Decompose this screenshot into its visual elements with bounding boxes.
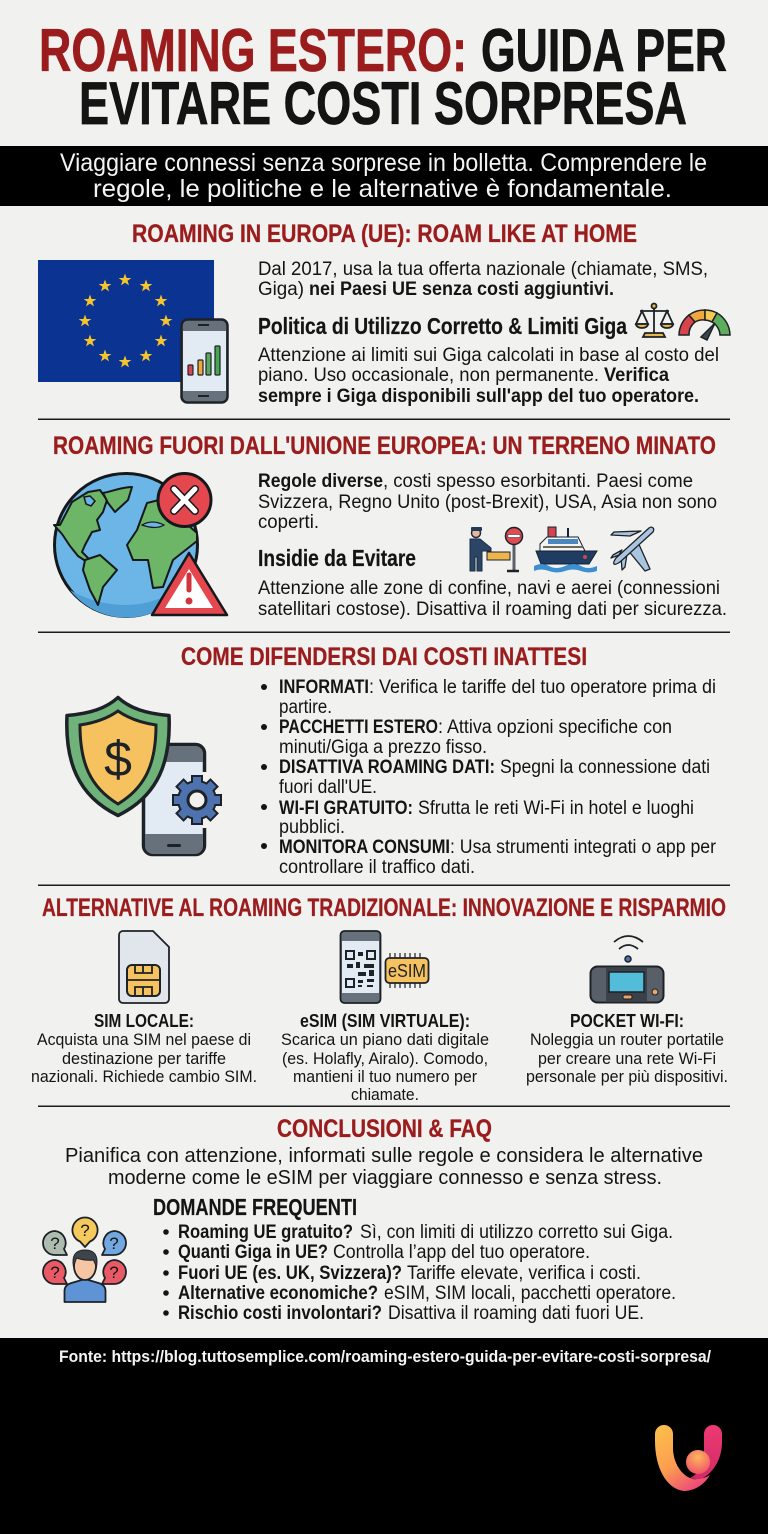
list: defenses: fuori dall'UE. [279, 777, 377, 798]
icon: person with question bubbles [43, 1217, 126, 1302]
card: eSIM: chiamate. [351, 1085, 419, 1104]
icon: person with question bubbles: ? [109, 1263, 119, 1282]
icon: eSIM phone and chip [340, 931, 428, 1003]
text: fair use details [258, 345, 719, 407]
list: defenses: INFORMATI [279, 677, 369, 698]
icon: pocket wifi router [590, 936, 664, 1002]
card: Pocket Wi-Fi: per creare una rete Wi-Fi [538, 1049, 716, 1068]
card: eSIM: eSIM (SIM VIRTUALE): [300, 1011, 470, 1031]
card: eSIM: Scarica un piano dati digitale [281, 1030, 489, 1049]
icon: person with question bubbles: ? [50, 1263, 60, 1282]
source link text: Fonte: https://blog.tuttosemplice.com/roaming-estero-guida-per-evitare-costi-sorpresa/ [59, 1347, 711, 1366]
list: FAQ: Roaming UE gratuito? [178, 1222, 353, 1243]
icon: ship [534, 527, 597, 572]
text: pitfalls details: Attenzione alle zone di confine, navi e aerei (connessioni [258, 578, 720, 599]
icon: shield and phone with gear [67, 698, 221, 854]
card: eSIM: (es. Holafly, Airalo). Comodo, [282, 1049, 488, 1068]
list: FAQ: Alternative economiche? [178, 1283, 378, 1304]
subheading: FAQ: DOMANDE FREQUENTI [153, 1194, 357, 1220]
card: SIM locale [31, 1011, 257, 1086]
icon: person with question bubbles: ? [80, 1221, 90, 1240]
text: EU intro [258, 259, 708, 300]
list: defenses: DISATTIVA ROAMING DATI: [279, 757, 495, 778]
list: defenses [261, 677, 717, 878]
list: defenses: MONITORA CONSUMI [279, 837, 450, 858]
text: rules outside EU: Svizzera, Regno Unito (post-Brexit), USA, Asia non sono [258, 492, 717, 513]
card: eSIM: mantieni il tuo numero per [293, 1067, 477, 1086]
list: FAQ: Rischio costi involontari? [178, 1303, 382, 1324]
list: FAQ: Quanti Giga in UE? [178, 1242, 328, 1263]
text: fair use details: Attenzione ai limiti sui Giga calcolati in base al costo del [258, 345, 719, 366]
title [39, 17, 727, 137]
icon: EU flag with phone [38, 260, 228, 402]
list: defenses: pubblici. [279, 817, 345, 838]
text: rules outside EU: Regole diverse [258, 471, 383, 492]
text: fair use details: sempre i Giga disponibili sull'app del tuo operatore. [258, 386, 699, 407]
icon: globe with warnings [54, 474, 227, 618]
subheading: pitfalls: Insidie da Evitare [258, 545, 416, 571]
subtitle band: regole, le politiche e le alternative è fondamentale. [93, 175, 672, 203]
card: eSIM [281, 1011, 489, 1104]
list: FAQ: Controlla l’app del tuo operatore. [333, 1242, 590, 1263]
text: EU intro: Dal 2017, usa la tua offerta nazionale (chiamate, SMS, [258, 259, 708, 280]
heading: come difendersi: COME DIFENDERSI DAI COSTI INATTESI [181, 643, 587, 671]
card: SIM locale: SIM LOCALE: [94, 1011, 194, 1031]
list: FAQ: eSIM, SIM locali, pacchetti operatore. [384, 1283, 676, 1304]
logo [655, 1425, 722, 1491]
card: SIM locale: nazionali. Richiede cambio SIM. [31, 1067, 257, 1086]
list: defenses: Spegni la connessione dati [500, 757, 710, 778]
list: FAQ: Sì, con limiti di utilizzo corretto sui Giga. [360, 1222, 673, 1243]
list: defenses: : Attiva opzioni specifiche con [438, 717, 672, 738]
icon: scales [636, 304, 673, 337]
list: defenses: controllare il traffico dati. [279, 857, 475, 878]
text: conclusion: Pianifica con attenzione, informati sulle regole e considera le alternative [65, 1145, 703, 1167]
heading: roaming in Europa: ROAMING IN EUROPA (UE): ROAM LIKE AT HOME [132, 220, 637, 248]
list: defenses: : Verifica le tariffe del tuo operatore prima di [369, 677, 716, 698]
text: fair use details: Verifica [604, 365, 669, 386]
list: defenses: Sfrutta le reti Wi-Fi in hotel e luoghi [418, 798, 694, 819]
card: Pocket Wi-Fi: Noleggia un router portatile [530, 1030, 724, 1049]
list: FAQ [163, 1222, 676, 1324]
card: SIM locale: Acquista una SIM nel paese di [37, 1030, 251, 1049]
text: rules outside EU: , costi spesso esorbitanti. Paesi come [383, 471, 693, 492]
subtitle band [0, 146, 768, 206]
text: EU intro: nei Paesi UE senza costi aggiuntivi. [309, 279, 614, 300]
subheading: fair use: Politica di Utilizzo Corretto & Limiti Giga [258, 313, 627, 339]
list: FAQ: Fuori UE (es. UK, Svizzera)? [178, 1263, 402, 1284]
icon: gauge [679, 310, 730, 340]
icon: airplane [611, 527, 654, 571]
text: conclusion: moderne come le eSIM per viaggiare connesso e senza stress. [108, 1167, 662, 1189]
text: conclusion [65, 1145, 703, 1189]
card: Pocket Wi-Fi: POCKET WI-FI: [570, 1011, 684, 1031]
text: pitfalls details [258, 578, 727, 620]
list: defenses: PACCHETTI ESTERO [279, 717, 438, 738]
icon: border officer [470, 527, 522, 571]
text: pitfalls details: satellitari costose). Disattiva il roaming dati per sicurezza. [258, 599, 727, 620]
text: fair use details: piano. Uso occasionale, non permanente. [258, 365, 599, 386]
icon: person with question bubbles: ? [50, 1234, 60, 1253]
icon: person with question bubbles: ? [109, 1234, 119, 1253]
list: defenses: partire. [279, 697, 332, 718]
card: Pocket Wi-Fi: personale per più dispositivi. [526, 1067, 728, 1086]
icon: eSIM phone and chip: eSIM [388, 961, 426, 981]
list: FAQ: Disattiva il roaming dati fuori UE. [388, 1303, 644, 1324]
text: EU intro: Giga) [258, 279, 304, 300]
card: SIM locale: destinazione per tariffe [62, 1049, 226, 1068]
list: FAQ: Tariffe elevate, verifica i costi. [407, 1263, 641, 1284]
text: rules outside EU: coperti. [258, 512, 319, 533]
list: defenses: : Usa strumenti integrati o app per [450, 837, 717, 858]
card: Pocket Wi-Fi [526, 1011, 728, 1086]
subtitle band: Viaggiare connessi senza sorprese in bolletta. Comprendere le [60, 149, 707, 177]
icon: SIM card [119, 931, 169, 1003]
list: defenses: minuti/Giga a prezzo fisso. [279, 737, 487, 758]
text: rules outside EU [258, 471, 717, 533]
icon: shield and phone with gear: $ [104, 731, 132, 787]
footer band with source and logo [0, 1338, 768, 1534]
list: defenses: WI-FI GRATUITO: [279, 798, 413, 819]
heading: conclusioni: CONCLUSIONI & FAQ [277, 1115, 492, 1143]
title: ROAMING ESTERO: [39, 17, 467, 84]
